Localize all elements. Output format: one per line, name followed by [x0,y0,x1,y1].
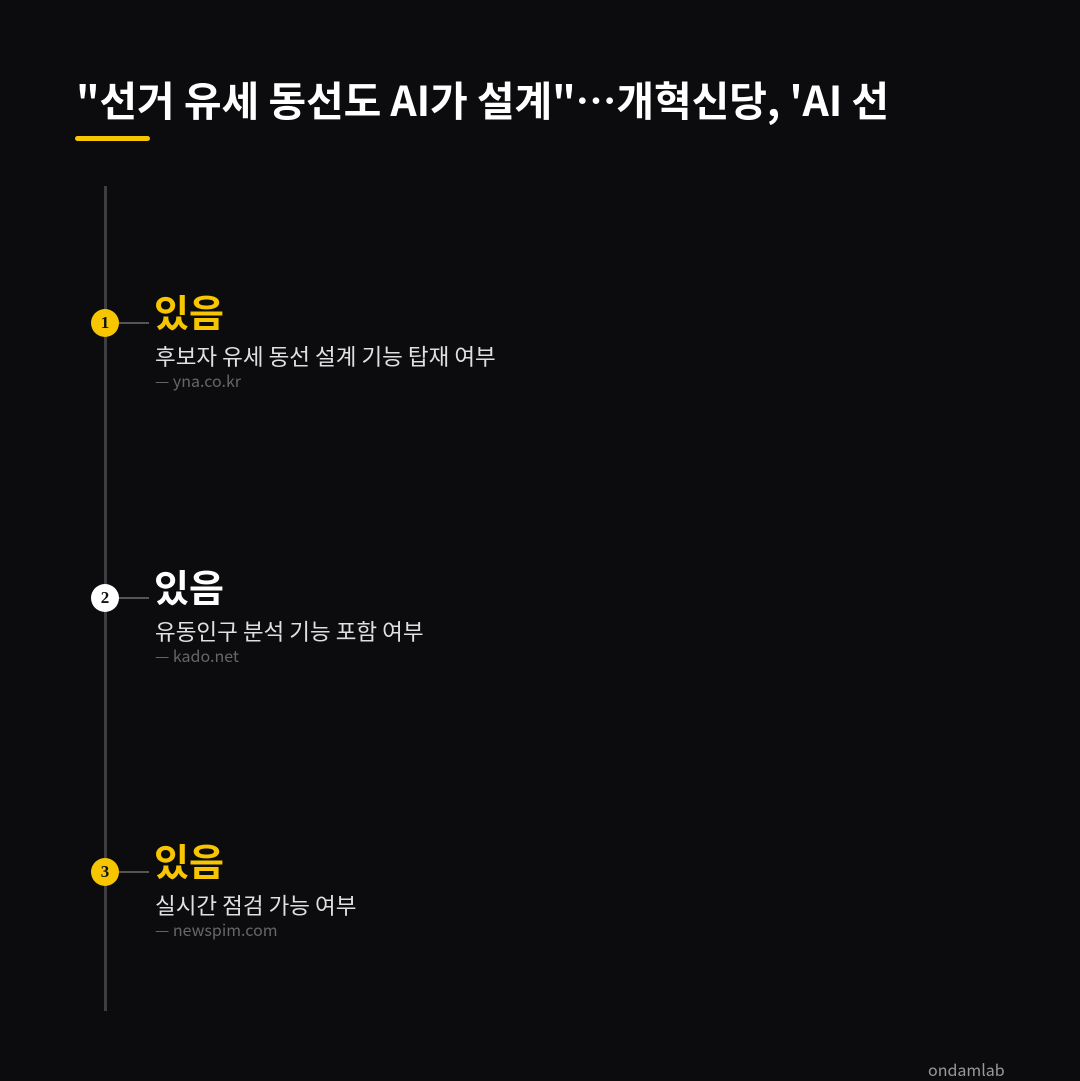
description 2: 유동인구 분석 기능 포함 여부 [155,615,424,647]
heading 3: 있음 [154,832,224,887]
source 1: — yna.co.kr [155,368,241,392]
marker 2 [91,584,119,612]
marker 1 [91,309,119,337]
heading 1: 있음 [154,283,224,338]
description 3: 실시간 점검 가능 여부 [155,889,356,921]
marker 3: 3 [101,862,109,881]
title underline [75,136,150,141]
item 3 [91,832,356,941]
title: "선거 유세 동선도 AI가 설계"…개혁신당, 'AI 선 [76,68,889,128]
marker 1: 1 [101,313,109,332]
description 1: 후보자 유세 동선 설계 기능 탑재 여부 [155,340,496,372]
source 3: — newspim.com [155,917,278,941]
source 2: — kado.net [155,643,239,667]
timeline line [104,186,107,1011]
marker 3 [91,858,119,886]
marker 2: 2 [101,588,109,607]
item 1 [91,283,496,392]
heading 2: 있음 [154,558,224,613]
item 2 [91,558,424,667]
footer brand: ondamlab [928,1057,1005,1081]
